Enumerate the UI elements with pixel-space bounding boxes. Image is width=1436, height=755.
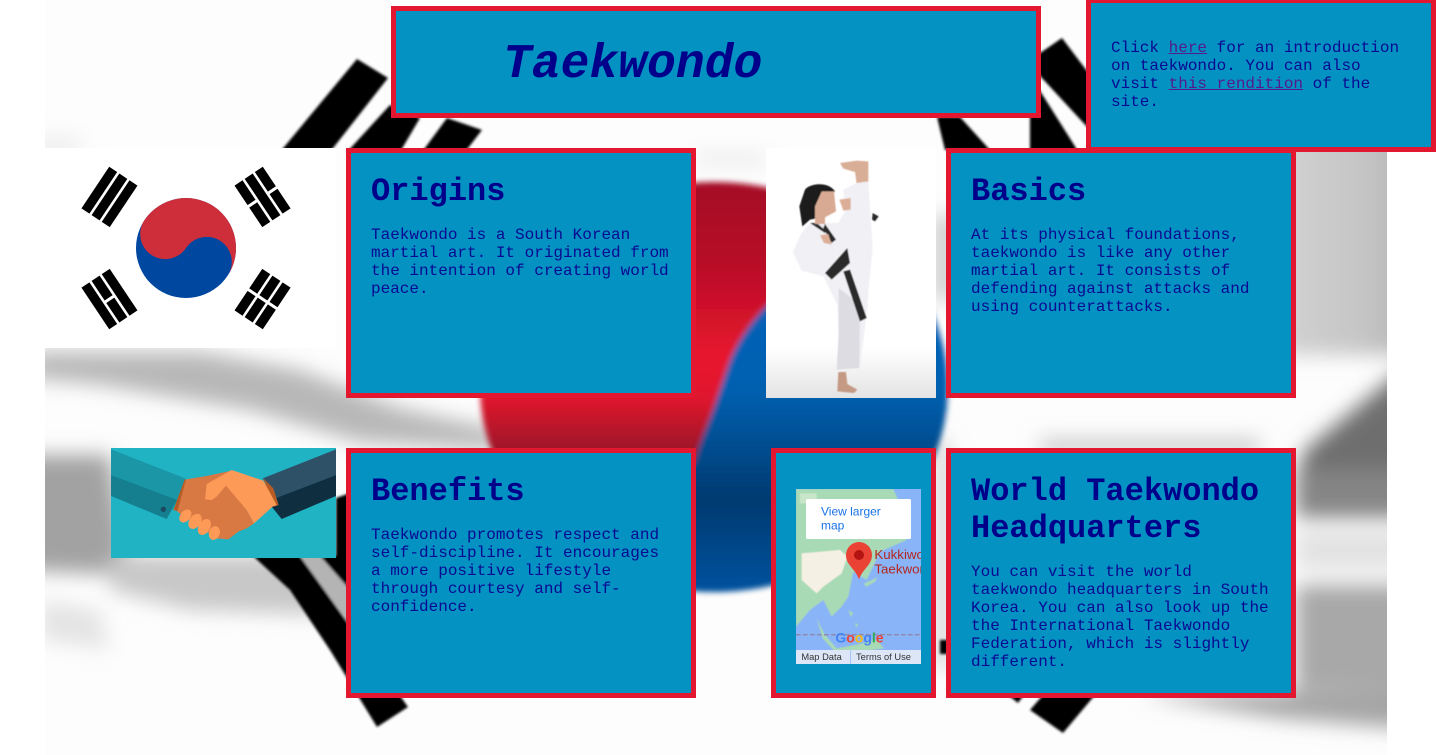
map pin <box>846 542 872 579</box>
headquarters text: You can visit the world taekwondo headquarters in South Korea. You can also look up the the International Taekwondo Federation, which is slightly different. <box>971 563 1269 671</box>
intro text: Click here for an introduction on taekwondo. You can also visit this rendition of the site. <box>1111 39 1399 111</box>
view larger map button <box>806 499 911 539</box>
heading: Basics <box>971 173 1086 210</box>
benefits text: Taekwondo promotes respect and self-discipline. It encourages a more positive lifestyle through courtesy and self-confidence. <box>371 526 659 616</box>
panel: basics <box>946 148 1296 398</box>
grey cloth shading, right <box>696 130 1430 730</box>
panel: world taekwondo headquarters <box>946 448 1296 698</box>
title: Taekwondo <box>503 38 762 92</box>
map footer: Terms of Use <box>856 652 911 662</box>
title panel <box>391 6 1041 118</box>
view larger map button: map <box>821 519 845 533</box>
panel: map <box>771 448 936 698</box>
panel: origins <box>346 148 696 398</box>
map footer <box>796 650 921 664</box>
panel: intro links <box>1086 0 1436 152</box>
map footer: Map Data <box>801 652 843 662</box>
image: South Korean flag <box>45 148 336 348</box>
Google logo: Google <box>835 629 884 645</box>
trigram bars <box>253 38 1095 733</box>
heading: Benefits <box>371 473 525 510</box>
view larger map button: View larger <box>821 505 881 519</box>
heading: World Taekwondo Headquarters <box>971 473 1259 547</box>
image: handshake illustration <box>111 448 336 558</box>
image: woman performing high kick <box>766 160 936 398</box>
basics text: At its physical foundations, taekwondo is like any other martial art. It consists of defending against attacks and using counterattacks. <box>971 226 1249 316</box>
taegeuk circle <box>480 170 960 610</box>
panel: benefits <box>346 448 696 698</box>
grey cloth shading, left <box>20 138 500 650</box>
heading: Origins <box>371 173 505 210</box>
embedded map <box>796 489 921 664</box>
origins text: Taekwondo is a South Korean martial art. It originated from the intention of creating world peace. <box>371 226 669 298</box>
